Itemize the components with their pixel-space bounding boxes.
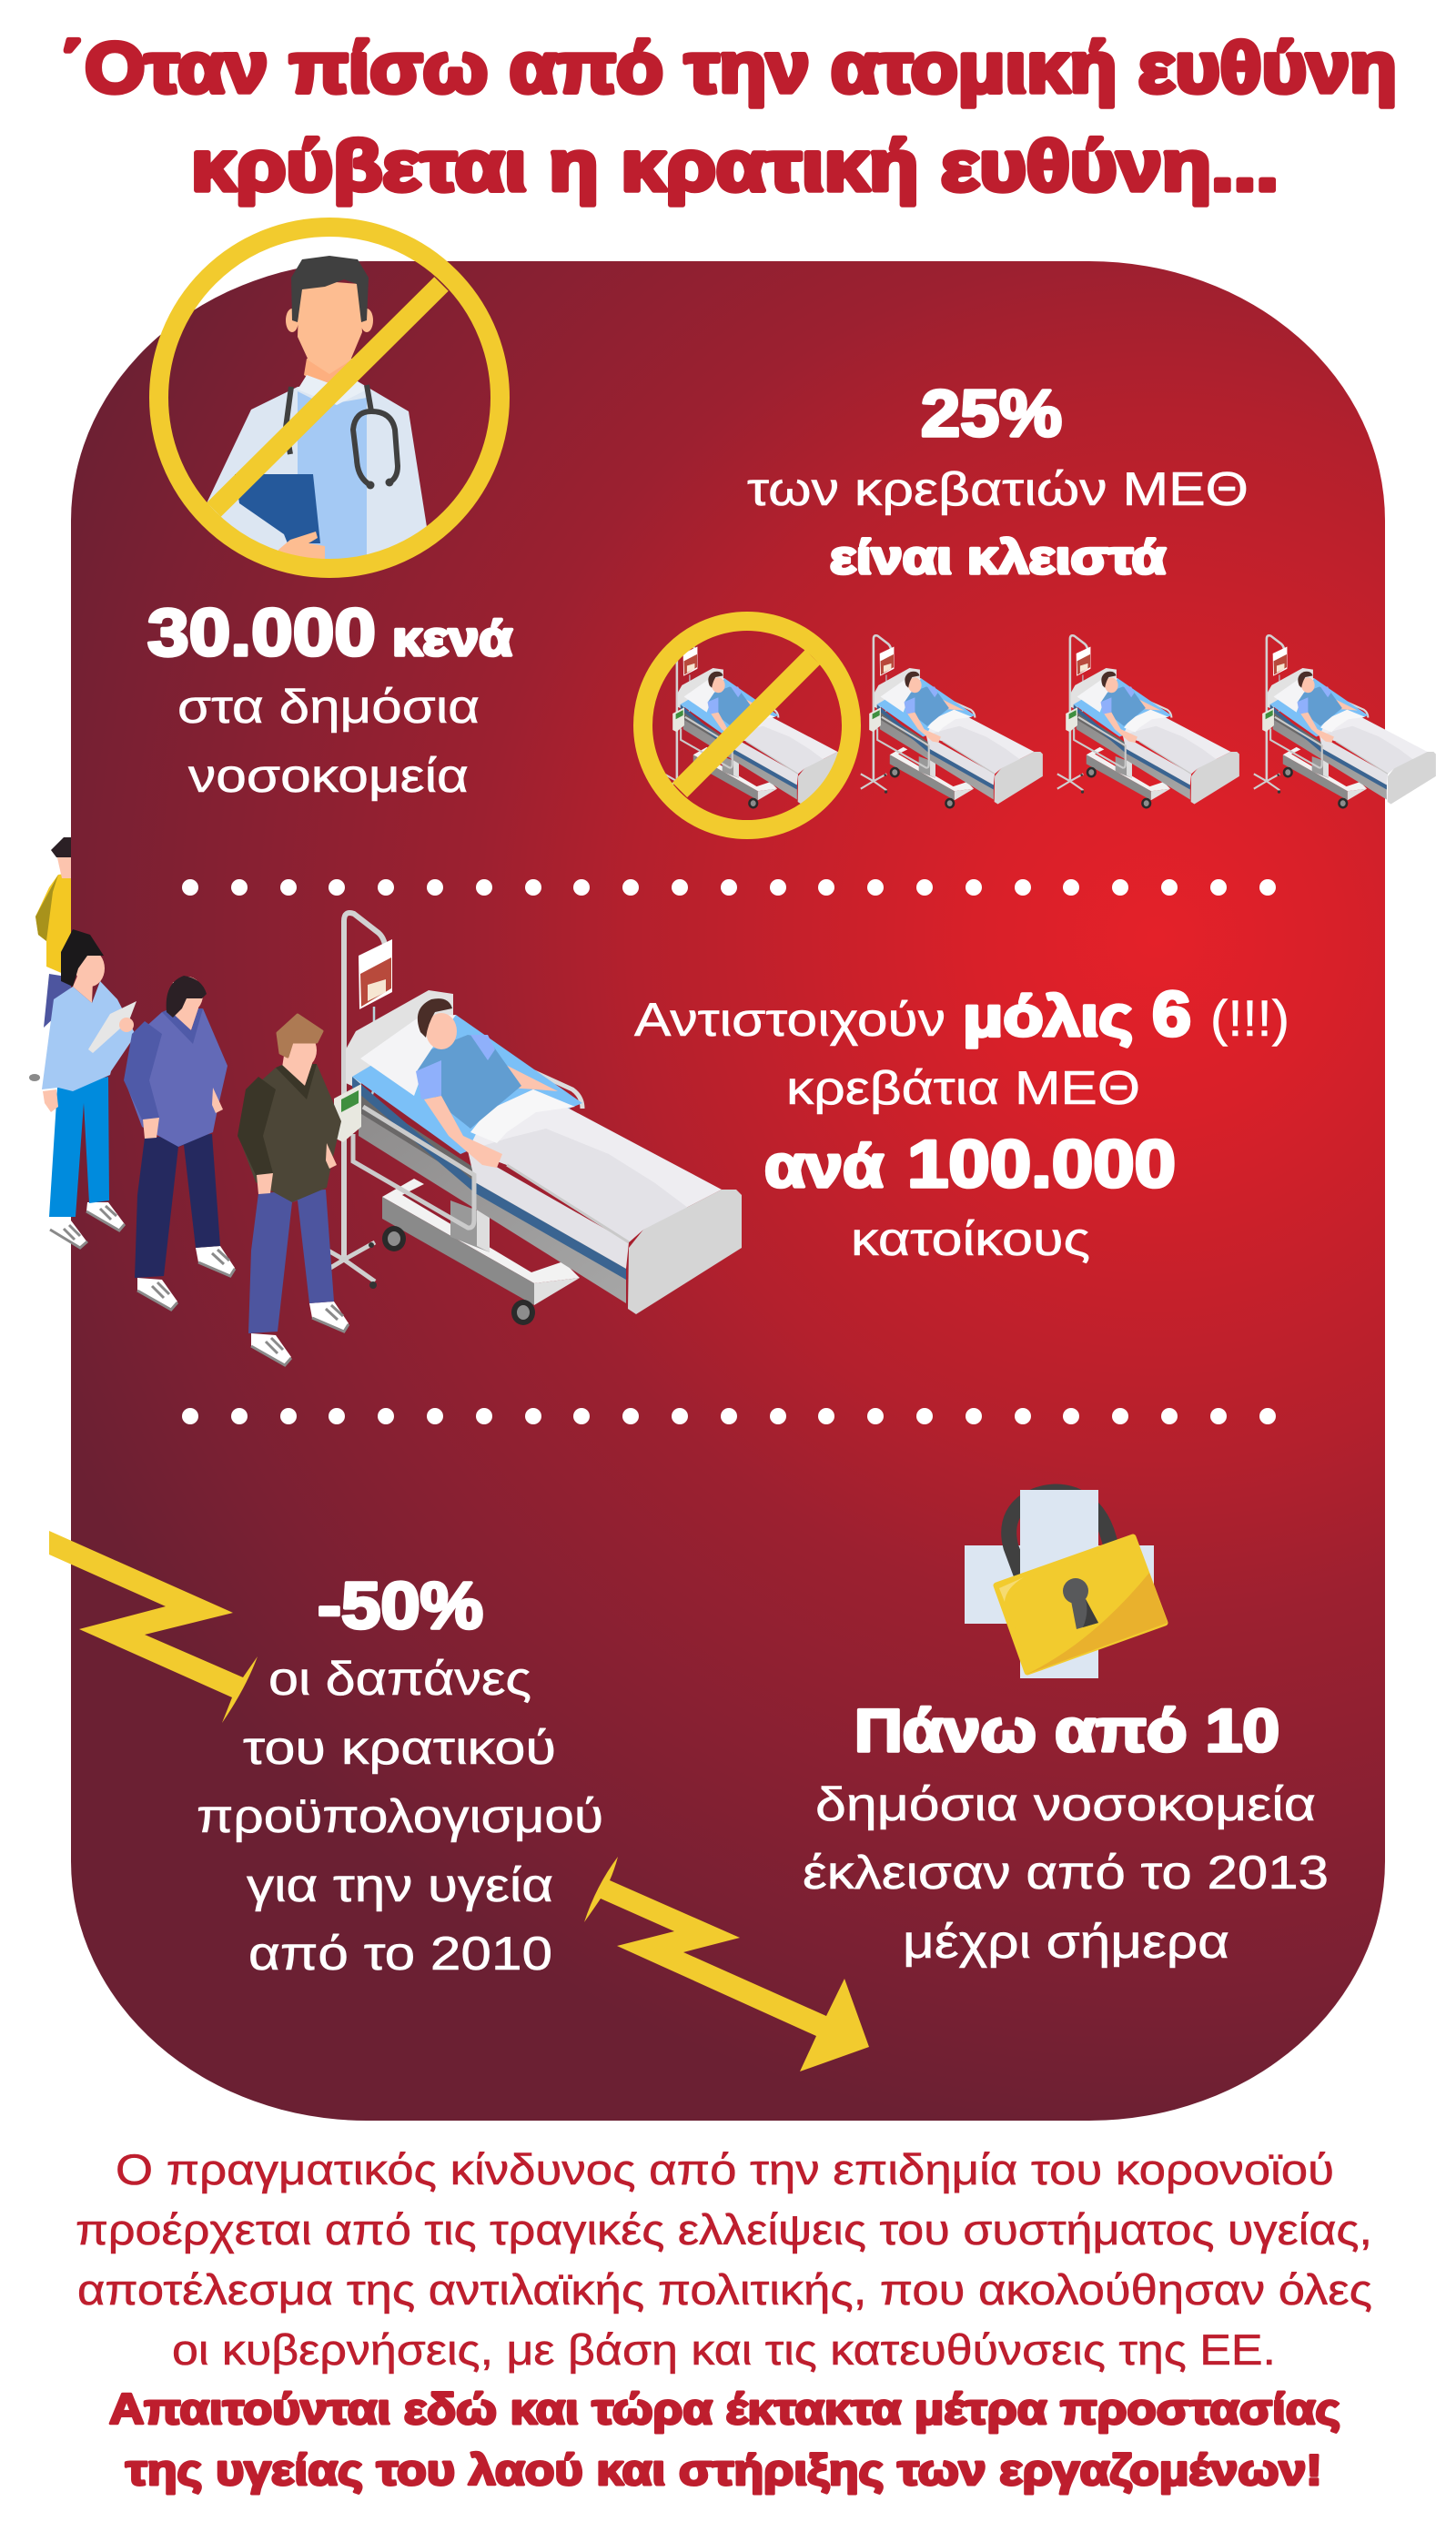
closing text block: της υγείας του λαού και στήριξης των εργαζομένων! — [126, 2446, 1322, 2494]
stat: 6 ICU beds per 100.000: (!!!) — [1210, 989, 1289, 1047]
stat: 6 ICU beds per 100.000: μόλις — [963, 986, 1133, 1048]
stat: 6 ICU beds per 100.000: κατοίκους — [851, 1213, 1090, 1266]
stat: 6 ICU beds per 100.000 — [634, 978, 1289, 1266]
icon: open bed 3 — [1254, 635, 1436, 809]
stat: 6 ICU beds per 100.000: Αντιστοιχούν — [634, 994, 945, 1047]
stat: 6 ICU beds per 100.000: κρεβάτια ΜΕΘ — [786, 1062, 1140, 1115]
stat: 30.000 κενά — [147, 596, 512, 803]
illustration: nurse with tablet — [42, 929, 136, 1248]
stat: -50% health budget: από το 2010 — [248, 1928, 552, 1980]
stat: 10 hospitals closed — [803, 1697, 1329, 1969]
stat: 30.000 κενά: 30.000 — [147, 596, 376, 670]
stat: 30.000 κενά: νοσοκομεία — [188, 750, 469, 803]
icon: doctor with prohibition sign — [158, 228, 500, 582]
icon: open bed 2 — [1057, 635, 1239, 809]
closing text block: προέρχεται από τις τραγικές ελλείψεις του συστήματος υγείας, — [76, 2205, 1372, 2254]
arrow: lower lightning zigzag — [584, 1857, 869, 2071]
stat: 30.000 κενά: στα δημόσια — [177, 681, 480, 734]
stat: -50% health budget — [197, 1570, 603, 1980]
stat: 10 hospitals closed: Πάνω από 10 — [854, 1697, 1279, 1764]
stat: 25% ICU beds closed: είναι κλειστά — [830, 532, 1166, 584]
stat: 6 ICU beds per 100.000: 6 — [1152, 978, 1191, 1049]
stat: 10 hospitals closed: έκλεισαν από το 2013 — [803, 1847, 1329, 1899]
title: κρύβεται η κρατική ευθύνη... — [191, 126, 1279, 206]
stat: 25% ICU beds closed: 25% — [921, 378, 1062, 451]
closing text block: αποτέλεσμα της αντιλαϊκής πολιτικής, που ακολούθησαν όλες — [77, 2265, 1372, 2314]
illustration: large hospital bed with patient — [314, 913, 742, 1325]
closing text block — [76, 2145, 1372, 2494]
title: ΄Οταν πίσω από την ατομική ευθύνη — [59, 27, 1397, 107]
stat: -50% health budget: του κρατικού — [243, 1722, 556, 1775]
background person: cropped nurse in yellow — [29, 837, 72, 1081]
illustration: relative in purple sweater — [124, 976, 235, 1310]
illustration: relative in olive sweater — [238, 1015, 349, 1365]
stat: 25% ICU beds closed: των κρεβατιών ΜΕΘ — [747, 463, 1249, 516]
stat: 30.000 κενά: κενά — [392, 612, 512, 666]
stat: -50% health budget: -50% — [318, 1570, 483, 1643]
stat: 10 hospitals closed: μέχρι σήμερα — [903, 1916, 1229, 1969]
stat: -50% health budget: οι δαπάνες — [268, 1653, 531, 1706]
icon: medical cross with padlock — [965, 1490, 1168, 1678]
closing text block: Ο πραγματικός κίνδυνος από την επιδημία του κορονοϊού — [116, 2145, 1334, 2193]
stat: -50% health budget: για την υγεία — [247, 1859, 553, 1912]
stat: 10 hospitals closed: δημόσια νοσοκομεία — [815, 1778, 1316, 1831]
closing text block: Απαιτούνται εδώ και τώρα έκτακτα μέτρα προστασίας — [109, 2385, 1340, 2433]
title — [59, 27, 1397, 206]
closing text block: οι κυβερνήσεις, με βάση και τις κατευθύνσεις της ΕΕ. — [172, 2325, 1276, 2374]
stat: 6 ICU beds per 100.000: 100.000 — [907, 1128, 1176, 1201]
stat: 6 ICU beds per 100.000: ανά — [764, 1132, 884, 1200]
stat: -50% health budget: προϋπολογισμού — [197, 1790, 603, 1843]
arrow: upper lightning zigzag — [49, 1531, 258, 1723]
stat: 25% ICU beds closed — [747, 378, 1249, 584]
panel: red rounded background — [71, 261, 1385, 2121]
icon: open bed 1 — [861, 635, 1043, 809]
icon: closed bed with prohibition sign — [642, 621, 852, 830]
prohibition ring — [158, 228, 500, 568]
